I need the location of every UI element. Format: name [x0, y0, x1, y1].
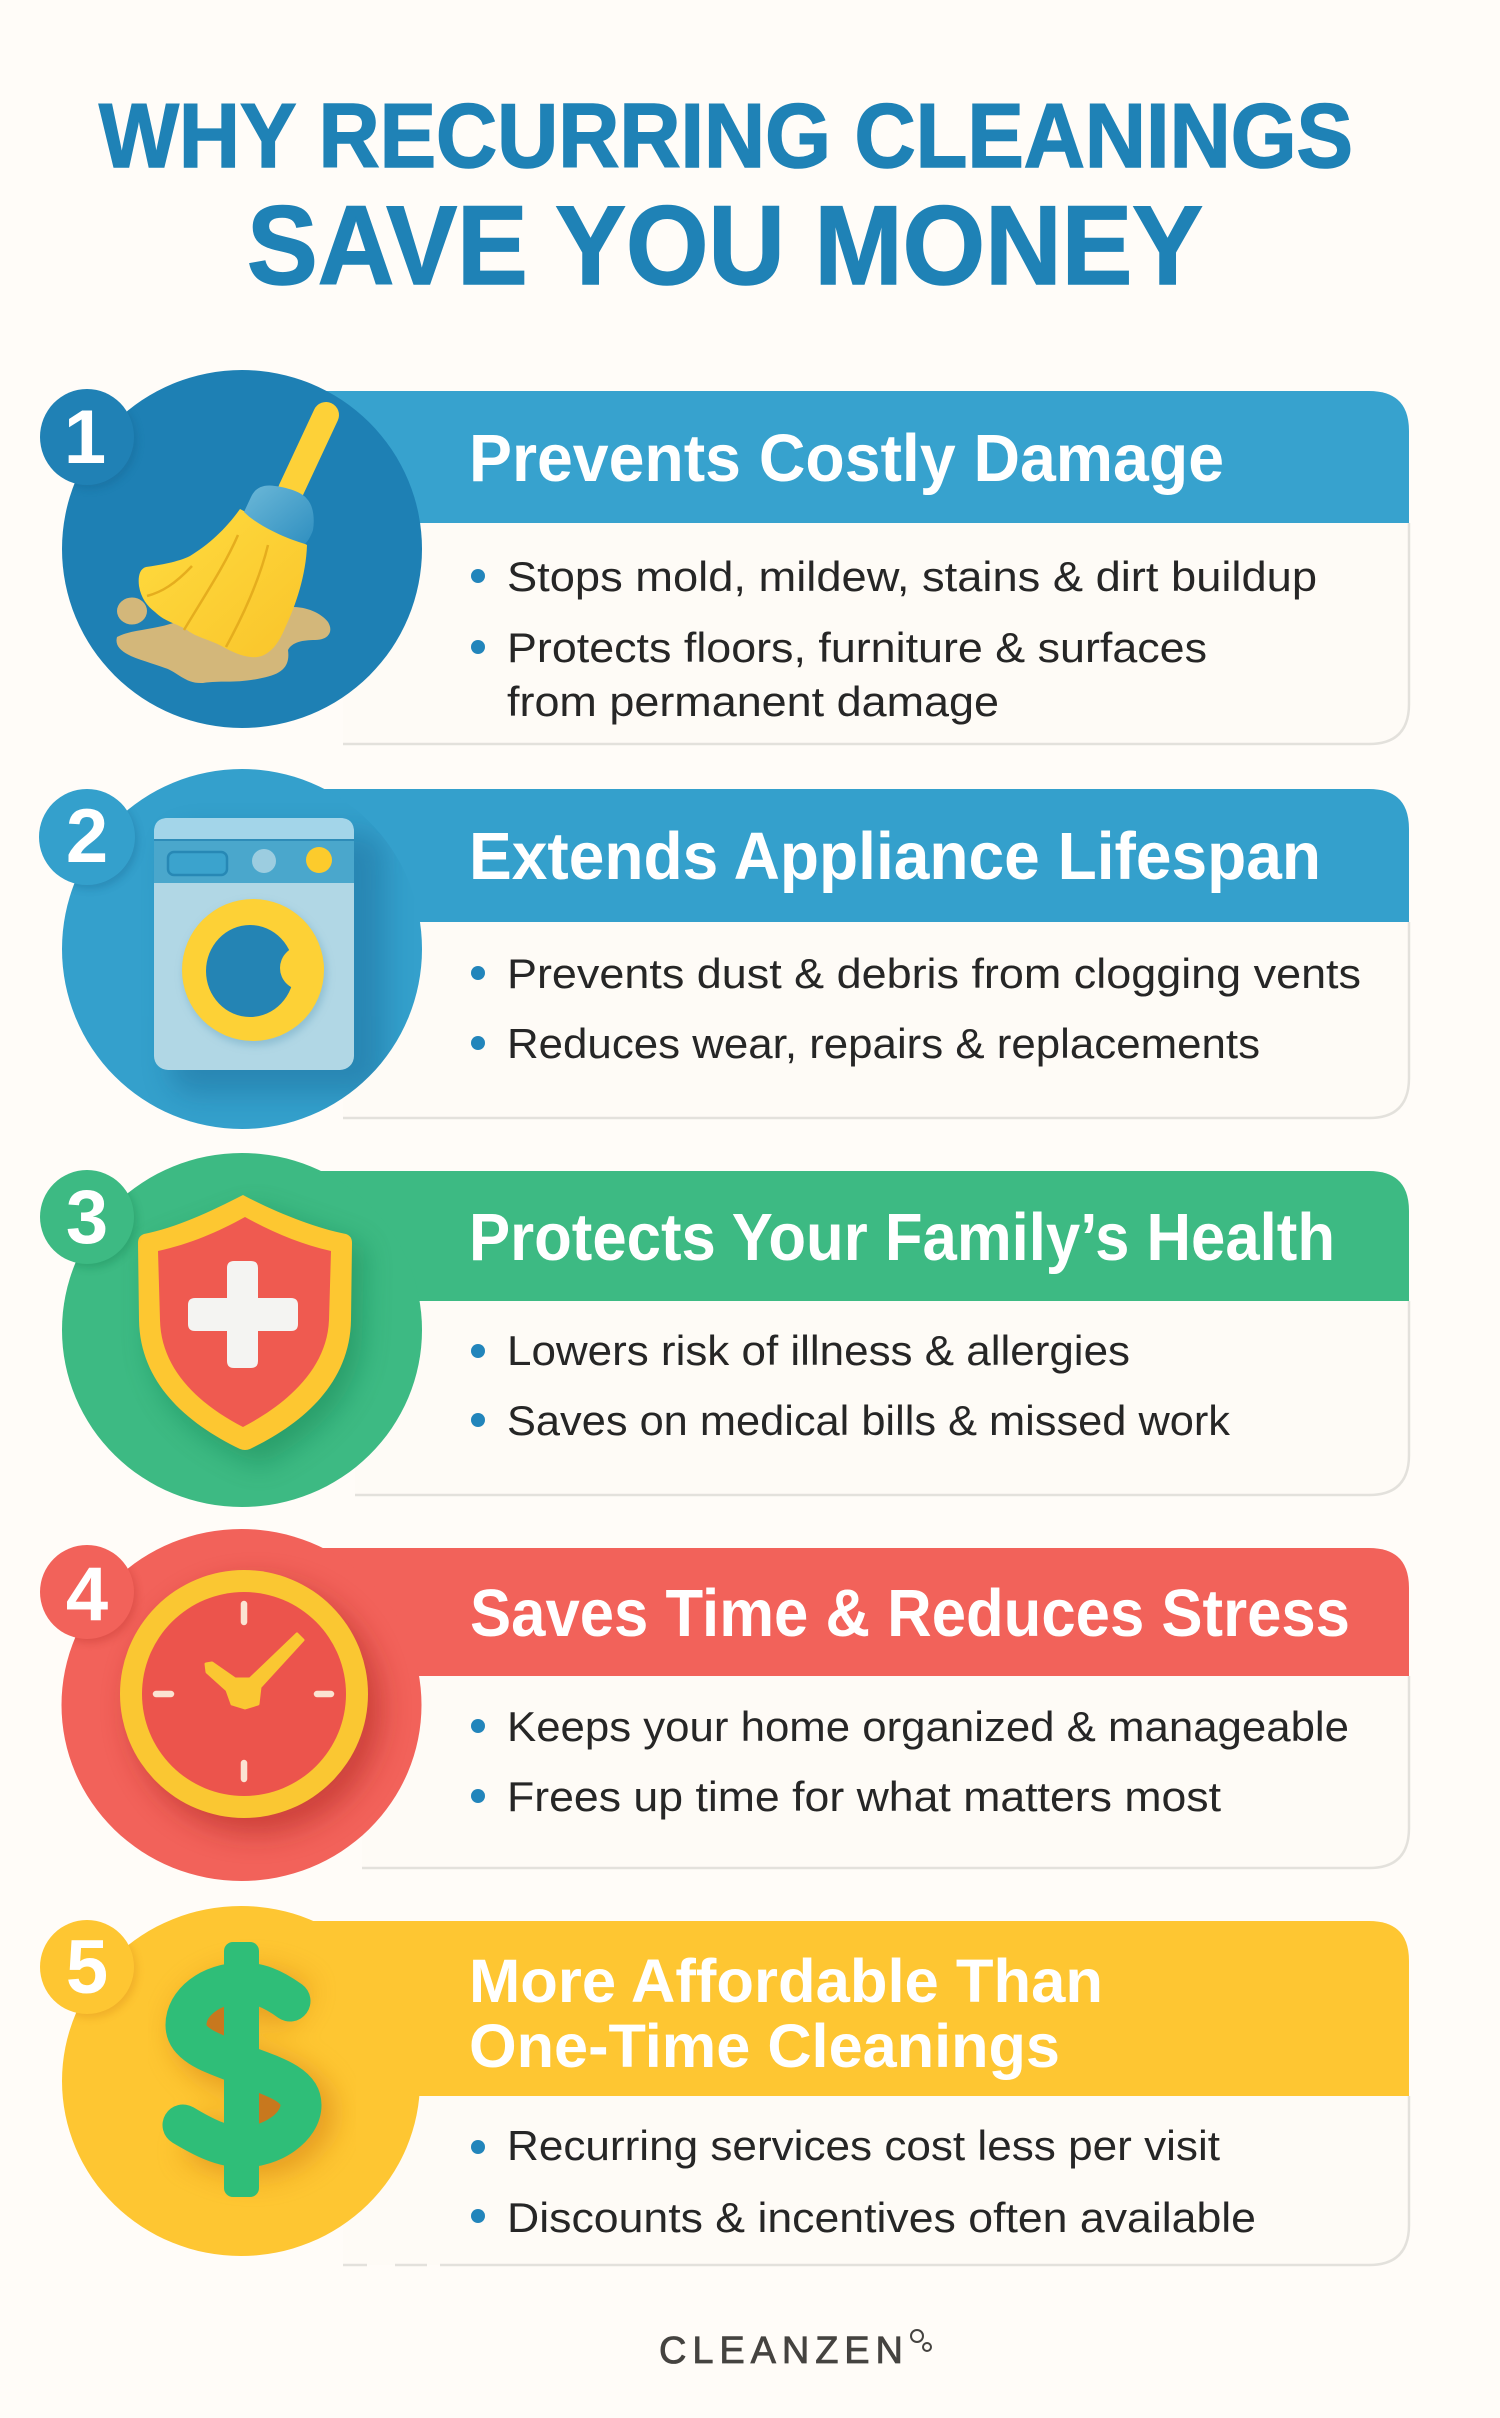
number badge 5 — [40, 1920, 137, 2018]
bullet list: appliance — [471, 950, 1361, 1067]
icon circle: washing machine — [62, 769, 422, 1129]
heading: more affordable than one-time cleanings — [469, 1947, 1103, 2080]
bullet list: time: Frees up time for what matters most — [507, 1773, 1221, 1820]
bullet list: affordability: Recurring services cost less per visit — [507, 2122, 1220, 2169]
number badge 4 — [40, 1545, 137, 1643]
panel: extends appliance lifespan — [39, 769, 1409, 1129]
heading: extends appliance lifespan: Extends Appliance Lifespan — [469, 819, 1321, 894]
panel: protects your family's health — [40, 1153, 1409, 1507]
icon: dollar sign — [183, 1942, 301, 2197]
heading: protects your family's health: Protects Your Family’s Health — [469, 1200, 1335, 1275]
number badge 1 — [40, 389, 137, 489]
bullet list: affordability — [471, 2122, 1256, 2241]
panel: more affordable than one-time cleanings — [40, 1906, 1409, 2265]
icon: shield — [138, 1195, 352, 1450]
panel: saves time and reduces stress — [40, 1529, 1409, 1881]
bullet list: health — [471, 1327, 1231, 1444]
heading: prevents costly damage: Prevents Costly Damage — [469, 421, 1224, 496]
icon circle: clock — [62, 1529, 422, 1881]
logo: cleanzen: CLEANZEN — [659, 2330, 903, 2372]
bullet list: damage: Stops mold, mildew, stains & dirt buildup — [507, 553, 1317, 600]
header: protects your family's health — [240, 1171, 1409, 1301]
bullet list: appliance: Prevents dust & debris from clogging vents — [507, 950, 1361, 997]
icon: washing machine — [154, 818, 354, 1070]
number badge 1: 1 — [64, 395, 106, 480]
icon: puddle — [116, 598, 330, 683]
bullet list: damage: from permanent damage — [507, 678, 999, 725]
bullet list: appliance: Reduces wear, repairs & replacements — [507, 1020, 1260, 1067]
header: saves time and reduces stress — [240, 1548, 1409, 1676]
bullet list: time — [471, 1703, 1349, 1820]
heading: saves time and reduces stress: Saves Time & Reduces Stress — [470, 1576, 1350, 1651]
bullet list: damage — [471, 553, 1317, 725]
bullet list: health: Lowers risk of illness & allergies — [507, 1327, 1130, 1374]
bullet list: health: Saves on medical bills & missed work — [507, 1397, 1231, 1444]
header: prevents costly damage — [240, 391, 1409, 523]
number badge 4: 4 — [66, 1552, 108, 1637]
title: SAVE YOU MONEY — [247, 183, 1203, 308]
header: more affordable than one-time cleanings — [240, 1921, 1409, 2096]
number badge 2: 2 — [66, 794, 108, 879]
title: WHY RECURRING CLEANINGS — [99, 86, 1353, 187]
title — [99, 86, 1353, 308]
heading: more affordable than one-time cleanings: One-Time Cleanings — [469, 2012, 1060, 2080]
icon: broom — [139, 415, 326, 657]
number badge 3 — [40, 1170, 137, 1268]
icon circle: shield — [62, 1153, 422, 1507]
bullet list: time: Keeps your home organized & manageable — [507, 1703, 1349, 1750]
icon circle: broom — [62, 370, 422, 728]
bullet list: affordability: Discounts & incentives often available — [507, 2194, 1256, 2241]
header: extends appliance lifespan — [240, 789, 1409, 922]
icon: clock — [120, 1570, 368, 1818]
number badge 2 — [39, 789, 138, 889]
bullet list: damage: Protects floors, furniture & surfaces — [507, 624, 1207, 671]
number badge 3: 3 — [66, 1175, 108, 1260]
icon circle: dollar sign — [62, 1906, 420, 2256]
heading: more affordable than one-time cleanings: More Affordable Than — [469, 1947, 1103, 2015]
number badge 5: 5 — [66, 1925, 108, 2010]
panel: prevents costly damage — [40, 370, 1409, 744]
